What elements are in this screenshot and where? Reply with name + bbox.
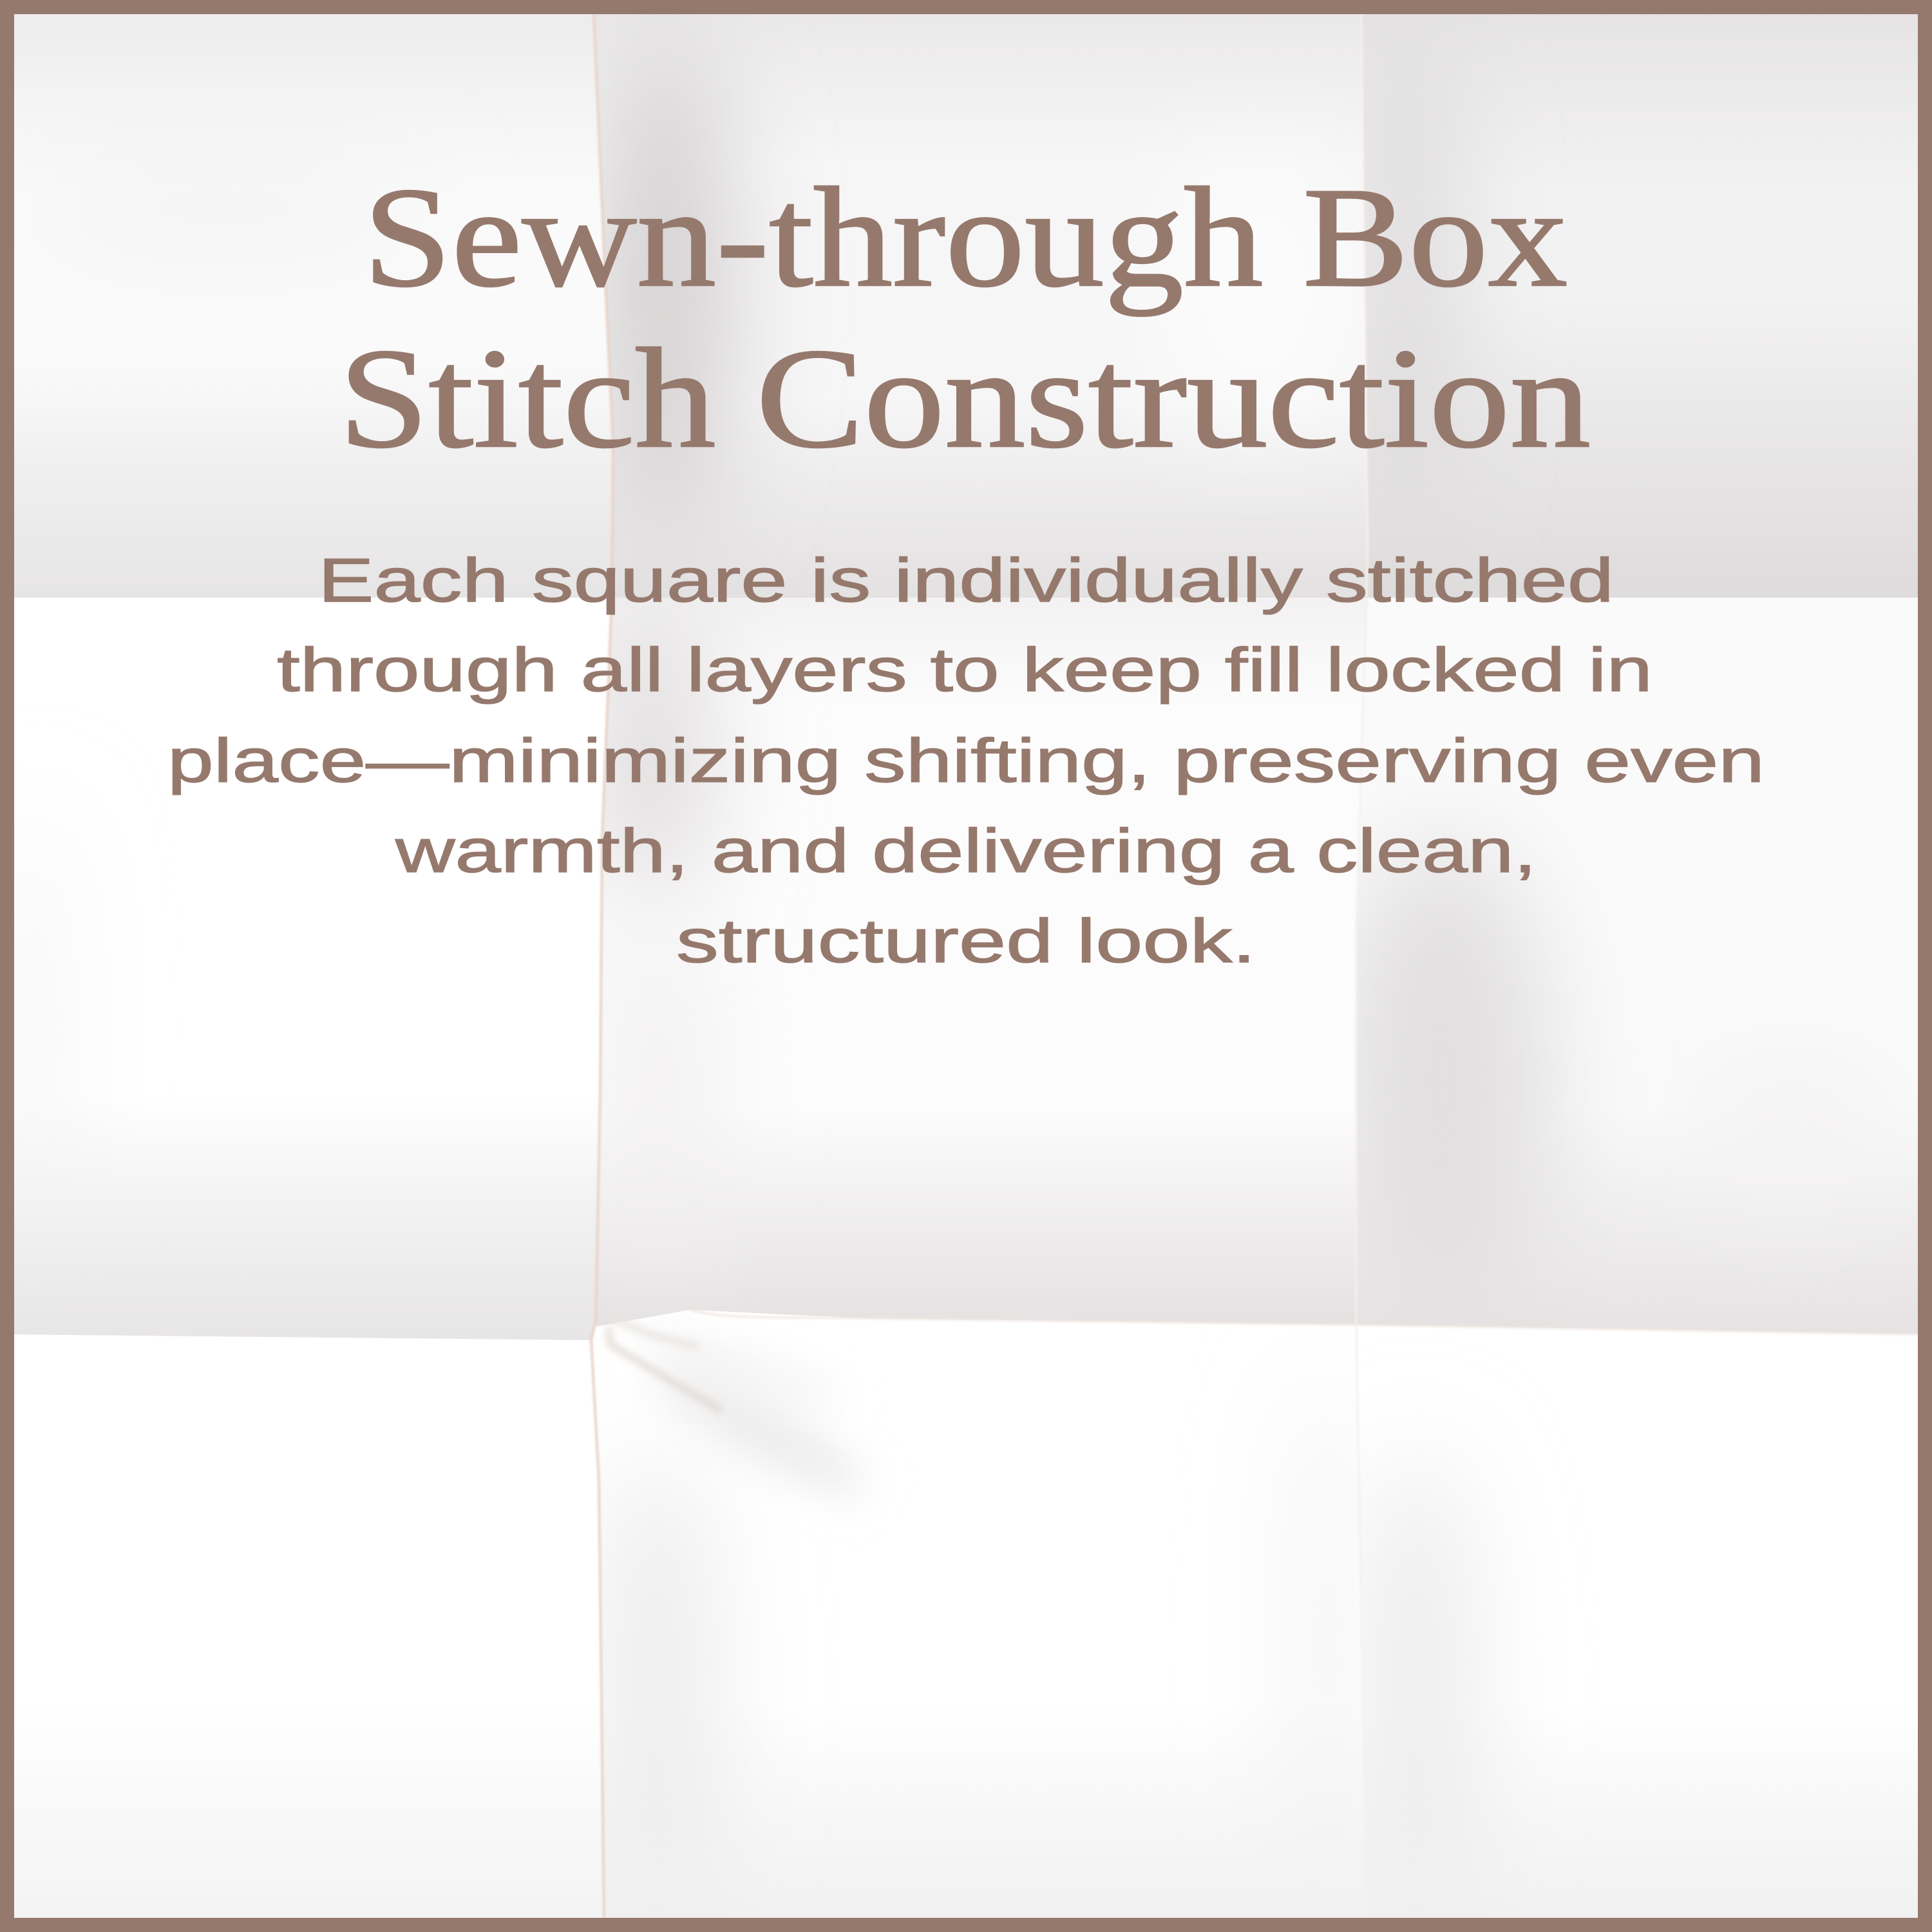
title: Stitch Construction [339, 319, 1591, 478]
body description text: structured look. [676, 907, 1256, 976]
body description text: warmth, and delivering a clean, [395, 817, 1537, 886]
body description text: place—minimizing shifting, preserving even [167, 726, 1765, 795]
title [339, 158, 1591, 478]
body description text: through all layers to keep fill locked in [277, 636, 1653, 705]
body description text [167, 546, 1765, 976]
title: Sewn-through Box [363, 158, 1567, 317]
body description text: Each square is individually stitched [318, 546, 1614, 615]
